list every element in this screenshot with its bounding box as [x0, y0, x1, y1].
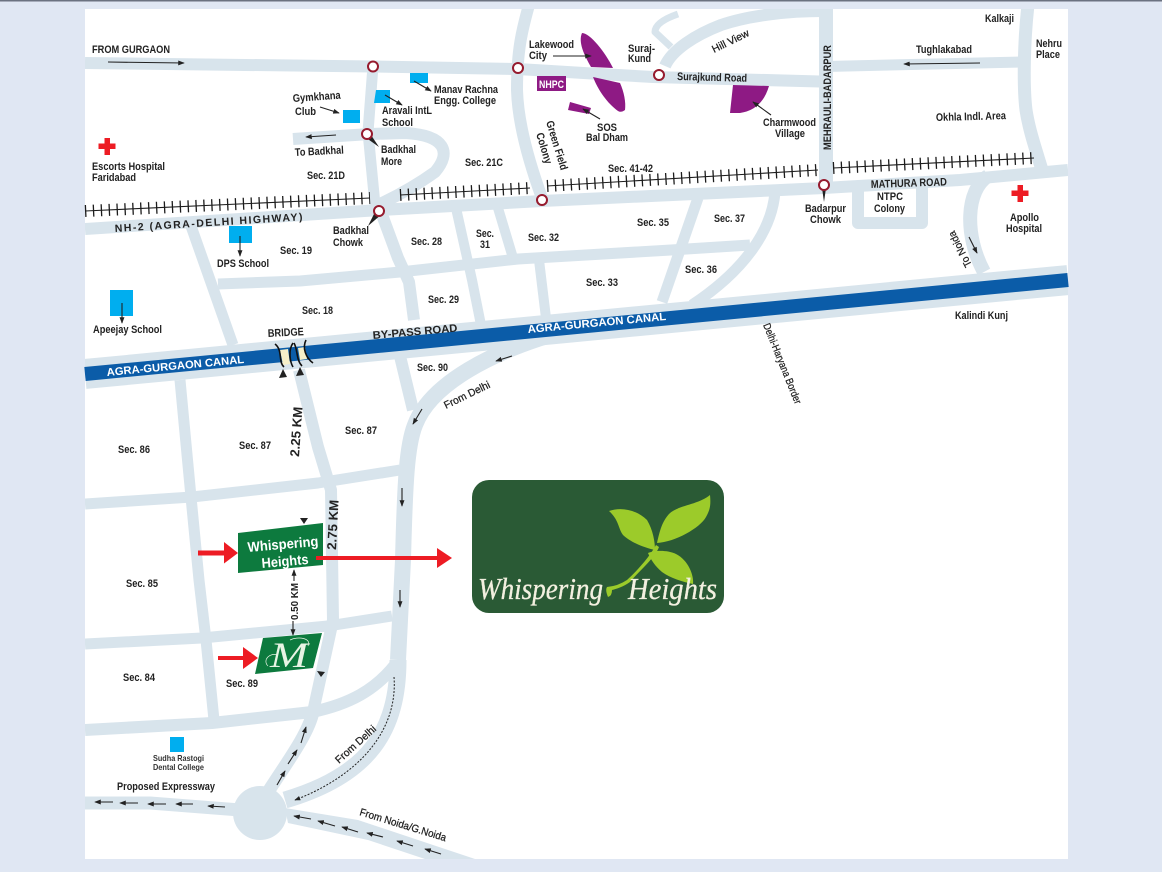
label: Badarpur Chowk	[805, 203, 847, 226]
label: from Noida: From Noida/G.Noida	[358, 806, 448, 844]
label: Sec. 87 west: Sec. 87	[239, 440, 271, 452]
label: Apollo Hospital	[1006, 212, 1042, 235]
label: Surajkund Road: Surajkund Road	[677, 71, 747, 85]
label: Charmwood Village	[763, 117, 816, 140]
label: Mathura Road: MATHURA ROAD	[871, 176, 947, 191]
label: Sec. 31: Sec.	[476, 228, 494, 240]
label: from Gurgaon: FROM GURGAON	[92, 44, 170, 56]
label: by-pass road: BY-PASS ROAD	[372, 323, 458, 342]
icons: school squares	[110, 73, 428, 752]
label: Suraj-Kund: Suraj-	[628, 43, 655, 55]
label: Green Field Colony: Colony	[533, 131, 554, 166]
label: Escorts Hospital: Escorts Hospital	[92, 161, 165, 173]
label: Badkhal More	[381, 144, 416, 168]
label: Sec. 31	[476, 228, 494, 251]
label: Lakewood City: Lakewood	[529, 39, 574, 51]
label: Badarpur Chowk: Badarpur	[805, 203, 847, 215]
label: Sec. 32: Sec. 32	[528, 232, 559, 244]
label: Gymkhana Club	[292, 90, 342, 118]
label: Sec. 85: Sec. 85	[126, 578, 158, 590]
label: Sec. 28: Sec. 28	[411, 236, 442, 248]
label: SOS Bal Dham	[586, 122, 628, 144]
label: Mehrauli-Badarpur: MEHRAULI-BADARPUR	[822, 45, 834, 150]
canal label left: AGRA-GURGAON CANAL	[106, 354, 245, 379]
label: 2.75 KM: 2.75 KM	[324, 499, 342, 550]
label: Badkhal Chowk: Badkhal	[333, 225, 369, 237]
logo wordmark	[478, 571, 717, 606]
map labels	[92, 13, 1062, 844]
label: Sudha Rastogi Dental College	[153, 753, 204, 772]
label: Sec. 36: Sec. 36	[685, 264, 717, 276]
label: Manav Rachna: Engg. College	[434, 95, 496, 107]
label: Sudha Rastogi Dental College: Sudha Rastogi	[153, 753, 204, 763]
label: Sec. 29: Sec. 29	[428, 294, 459, 306]
label: from Delhi south: From Delhi	[333, 723, 379, 766]
sign: M project logo	[255, 633, 322, 675]
label: Apollo Hospital: Hospital	[1006, 223, 1042, 235]
icon: Apollo hospital cross	[1012, 185, 1028, 202]
label: Sec. 33: Sec. 33	[586, 277, 618, 289]
logo wordmark: Whispering	[478, 571, 603, 606]
label: Apeejay School: Apeejay School	[93, 324, 162, 336]
label: DPS School: DPS School	[217, 258, 269, 270]
label: Nehru Place: Nehru	[1036, 38, 1062, 50]
label: Sec. 21D: Sec. 21D	[307, 170, 345, 182]
sign: M project logo: M	[269, 635, 311, 675]
sign: Whispering Heights	[238, 523, 323, 573]
label: Kalindi Kunj: Kalindi Kunj	[955, 310, 1008, 322]
label: proposed expressway: Proposed Expressway	[117, 781, 216, 793]
logo wordmark: Heights	[627, 571, 717, 606]
purple landmarks	[537, 33, 769, 114]
label: Sec. 41-42: Sec. 41-42	[608, 163, 653, 175]
direction arrows	[95, 56, 980, 854]
label: Badkhal More: More	[381, 156, 402, 168]
label: Lakewood City: City	[529, 50, 548, 62]
label: NTPC Colony: NTPC	[877, 191, 903, 203]
icon: leaves	[606, 495, 710, 597]
label: SOS Bal Dham: SOS	[597, 122, 617, 134]
label: Badkhal Chowk	[333, 225, 369, 249]
label: Okhla Industrial Area: Okhla Indl. Area	[936, 110, 1007, 124]
label: Tughlakabad: Tughlakabad	[916, 44, 972, 56]
label: Sec. 18: Sec. 18	[302, 305, 333, 317]
label: Delhi-Haryana Border: Delhi-Haryana Border	[760, 322, 804, 406]
label: 0.50 KM: 0.50 KM	[290, 583, 301, 620]
label: Nehru Place	[1036, 38, 1062, 61]
label: Apollo Hospital: Apollo	[1010, 212, 1039, 224]
label: Suraj-Kund: Kund	[628, 53, 651, 65]
railway line	[85, 158, 1034, 211]
label: Gymkhana Club: Gymkhana	[292, 90, 342, 105]
label: Escorts Hospital: Faridabad	[92, 172, 136, 184]
label: Sec. 86: Sec. 86	[118, 444, 150, 456]
label: Hill View: Hill View	[710, 27, 752, 56]
icon: Escorts hospital cross	[98, 138, 116, 155]
label: Sec. 35: Sec. 35	[637, 217, 669, 229]
label: Sec. 90: Sec. 90	[417, 362, 448, 374]
label: Green Field Colony: Green Field	[543, 119, 570, 172]
label: Sec. 31: 31	[480, 239, 490, 251]
label: Badarpur Chowk: Chowk	[810, 214, 842, 226]
label: Sec. 19: Sec. 19	[280, 245, 312, 257]
label: bridge: BRIDGE	[268, 326, 304, 340]
label: Manav Rachna: Manav Rachna	[434, 84, 499, 96]
logo: Whispering Heights	[472, 480, 724, 613]
label: Sec. 37: Sec. 37	[714, 213, 745, 225]
label: Aravali School: School	[382, 117, 413, 129]
junction markers	[362, 62, 829, 226]
label: to Noida: To Noida	[946, 229, 975, 269]
label: to Badkhal: To Badkhal	[295, 144, 344, 159]
label: Sec. 87 east: Sec. 87	[345, 425, 377, 437]
label: Sec. 89: Sec. 89	[226, 678, 258, 690]
label: Badkhal Chowk: Chowk	[333, 237, 364, 249]
label: NH-2 highway: NH-2 (AGRA-DELHI HIGHWAY)	[114, 211, 303, 235]
bridge direction triangles	[279, 367, 304, 378]
label: Sec. 21C: Sec. 21C	[465, 157, 503, 169]
label: Nehru Place: Place	[1036, 49, 1060, 61]
sign: Whispering Heights: Heights	[261, 551, 309, 571]
label: NHPC: NHPC	[539, 79, 564, 91]
label: Escorts Hospital	[92, 161, 165, 184]
canal	[85, 280, 1068, 374]
label: Badkhal More: Badkhal	[381, 144, 416, 156]
red arrow to Whispering Heights	[198, 542, 238, 564]
label: NTPC Colony: Colony	[874, 203, 906, 215]
red arrow to M site	[218, 647, 258, 669]
label: 2.25 KM: 2.25 KM	[287, 406, 305, 457]
label: Aravali School	[382, 105, 432, 129]
sign: Whispering Heights: Whispering	[247, 533, 319, 555]
label: Sec. 84: Sec. 84	[123, 672, 156, 684]
label: SOS Bal Dham: Bal Dham	[586, 132, 628, 144]
label: from Delhi: From Delhi	[442, 379, 492, 412]
label: NTPC Colony	[874, 191, 906, 215]
canal label right: AGRA-GURGAON CANAL	[527, 311, 667, 336]
red arrow to logo	[316, 548, 452, 568]
label: Aravali School: Aravali IntL	[382, 105, 432, 117]
label: Charmwood Village: Village	[775, 128, 805, 140]
label: Sudha Rastogi Dental College: Dental College	[153, 762, 204, 772]
label: Charmwood Village: Charmwood	[763, 117, 816, 129]
label: Gymkhana Club: Club	[295, 106, 316, 118]
bridge	[275, 340, 313, 367]
label: Kalkaji: Kalkaji	[985, 13, 1014, 25]
label: Manav Rachna	[434, 84, 499, 107]
label: Suraj-Kund	[628, 43, 655, 65]
label: Lakewood City	[529, 39, 574, 62]
label: Green Field Colony	[533, 119, 570, 172]
